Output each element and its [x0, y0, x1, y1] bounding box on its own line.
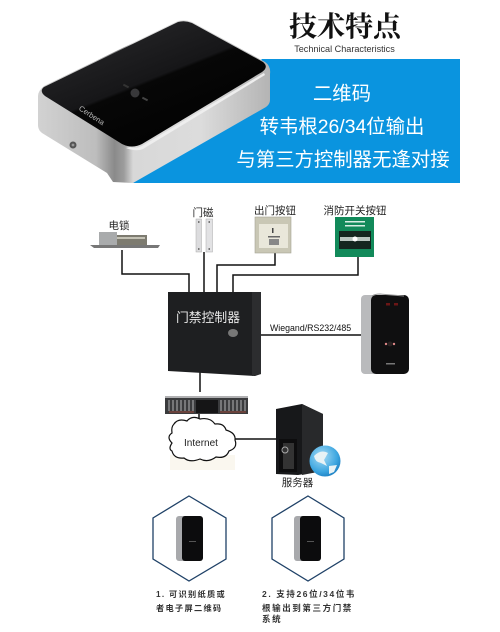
caption 2: 系统 — [262, 614, 282, 624]
caption 1: 者电子屏二维码 — [156, 603, 222, 613]
mini reader 2 — [294, 516, 321, 561]
hexagon feature 2 — [272, 496, 344, 581]
label: exit button: 出门按钮 — [254, 204, 296, 217]
icon: fire switch button — [335, 217, 374, 257]
caption 2: 2. 支持26位/34位韦 — [262, 589, 356, 599]
caption 1: 1. 可识别纸质或 — [156, 589, 226, 599]
caption 1 — [156, 589, 226, 613]
icon: exit button — [255, 217, 291, 253]
banner text line 1: 二维码 — [313, 83, 371, 105]
controller box — [168, 292, 261, 376]
icon: globe — [310, 446, 340, 476]
tower server — [276, 404, 323, 475]
banner text line 2: 转韦根26/34位输出 — [260, 116, 424, 138]
label: door magnet: 门磁 — [192, 206, 214, 219]
caption 2 — [262, 589, 356, 624]
rack server — [165, 396, 248, 414]
label: fire switch button: 消防开关按钮 — [324, 204, 387, 217]
internet cloud — [169, 417, 236, 461]
label: electric lock: 电锁 — [108, 219, 130, 232]
panel: blue feature banner — [133, 59, 460, 183]
icon: door magnet — [196, 219, 212, 252]
device: large reader photo — [38, 20, 270, 183]
title: 技术特点 — [289, 11, 403, 43]
icon: electric lock — [90, 232, 160, 248]
caption 2: 根输出到第三方门禁 — [262, 603, 353, 613]
banner text line 3: 与第三方控制器无逢对接 — [236, 149, 450, 171]
sensor — [130, 88, 140, 98]
brand label: Cerbena — [77, 104, 107, 127]
card reader device — [361, 294, 409, 374]
controller lock — [228, 329, 238, 337]
mini reader 1 — [176, 516, 203, 561]
hexagon feature 1 — [153, 496, 226, 581]
label: server: 服务器 — [282, 476, 314, 489]
jack — [70, 142, 76, 148]
controller label: 门禁控制器 — [176, 310, 240, 325]
wiring — [122, 250, 361, 439]
subtitle: Technical Characteristics — [294, 44, 395, 54]
cloud shadow — [170, 455, 235, 470]
label: protocol: Wiegand/RS232/485 — [270, 323, 351, 333]
cloud label: Internet — [184, 438, 218, 449]
